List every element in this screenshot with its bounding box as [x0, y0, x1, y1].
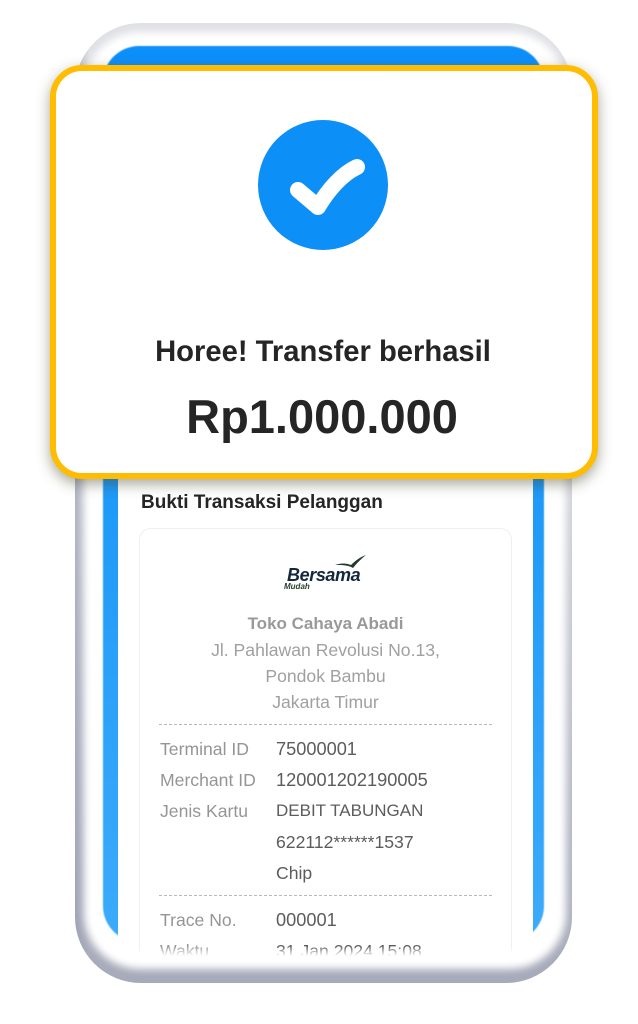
- logo wordmark: Bersama: [287, 565, 360, 585]
- icon: success check: [258, 120, 388, 250]
- receipt details rows: 120001202190005: [276, 770, 428, 790]
- logo subtext: Mudah: [284, 582, 310, 591]
- success title: Horee! Transfer berhasil: [155, 336, 491, 368]
- success card: [50, 65, 598, 479]
- trace and time rows: [160, 910, 422, 956]
- phone frame: [75, 23, 572, 983]
- divider: [159, 724, 492, 725]
- receipt heading: Bukti Transaksi Pelanggan: [141, 492, 383, 513]
- trace and time rows: Trace No.: [160, 910, 237, 930]
- bottom fade over the receipt: [118, 946, 533, 956]
- logo: Bersama Mudah: [284, 555, 366, 591]
- receipt card outline: [139, 528, 512, 988]
- receipt details rows: DEBIT TABUNGAN: [276, 801, 423, 820]
- receipt details rows: 75000001: [276, 739, 357, 759]
- receipt details rows: Chip: [276, 863, 312, 883]
- amount: Rp1.000.000: [186, 390, 458, 443]
- merchant address: Jakarta Timur: [272, 692, 379, 712]
- merchant address: Pondok Bambu: [265, 666, 386, 686]
- receipt details rows: Merchant ID: [160, 770, 256, 790]
- receipt area: [139, 492, 512, 951]
- receipt details rows: 622112******1537: [276, 832, 414, 852]
- receipt details rows: [160, 739, 428, 883]
- divider: [159, 895, 492, 896]
- merchant address: [211, 640, 440, 712]
- phone screen blue background: [103, 46, 544, 942]
- merchant address: Jl. Pahlawan Revolusi No.13,: [211, 640, 440, 660]
- merchant name: Toko Cahaya Abadi: [248, 614, 403, 633]
- white panel inside the screen: [118, 473, 533, 951]
- logo bird swoosh: [335, 555, 366, 568]
- receipt details rows: Jenis Kartu: [160, 801, 248, 821]
- receipt details rows: Terminal ID: [160, 739, 249, 759]
- frame inner white face: [84, 32, 566, 969]
- trace and time rows: 000001: [276, 910, 337, 930]
